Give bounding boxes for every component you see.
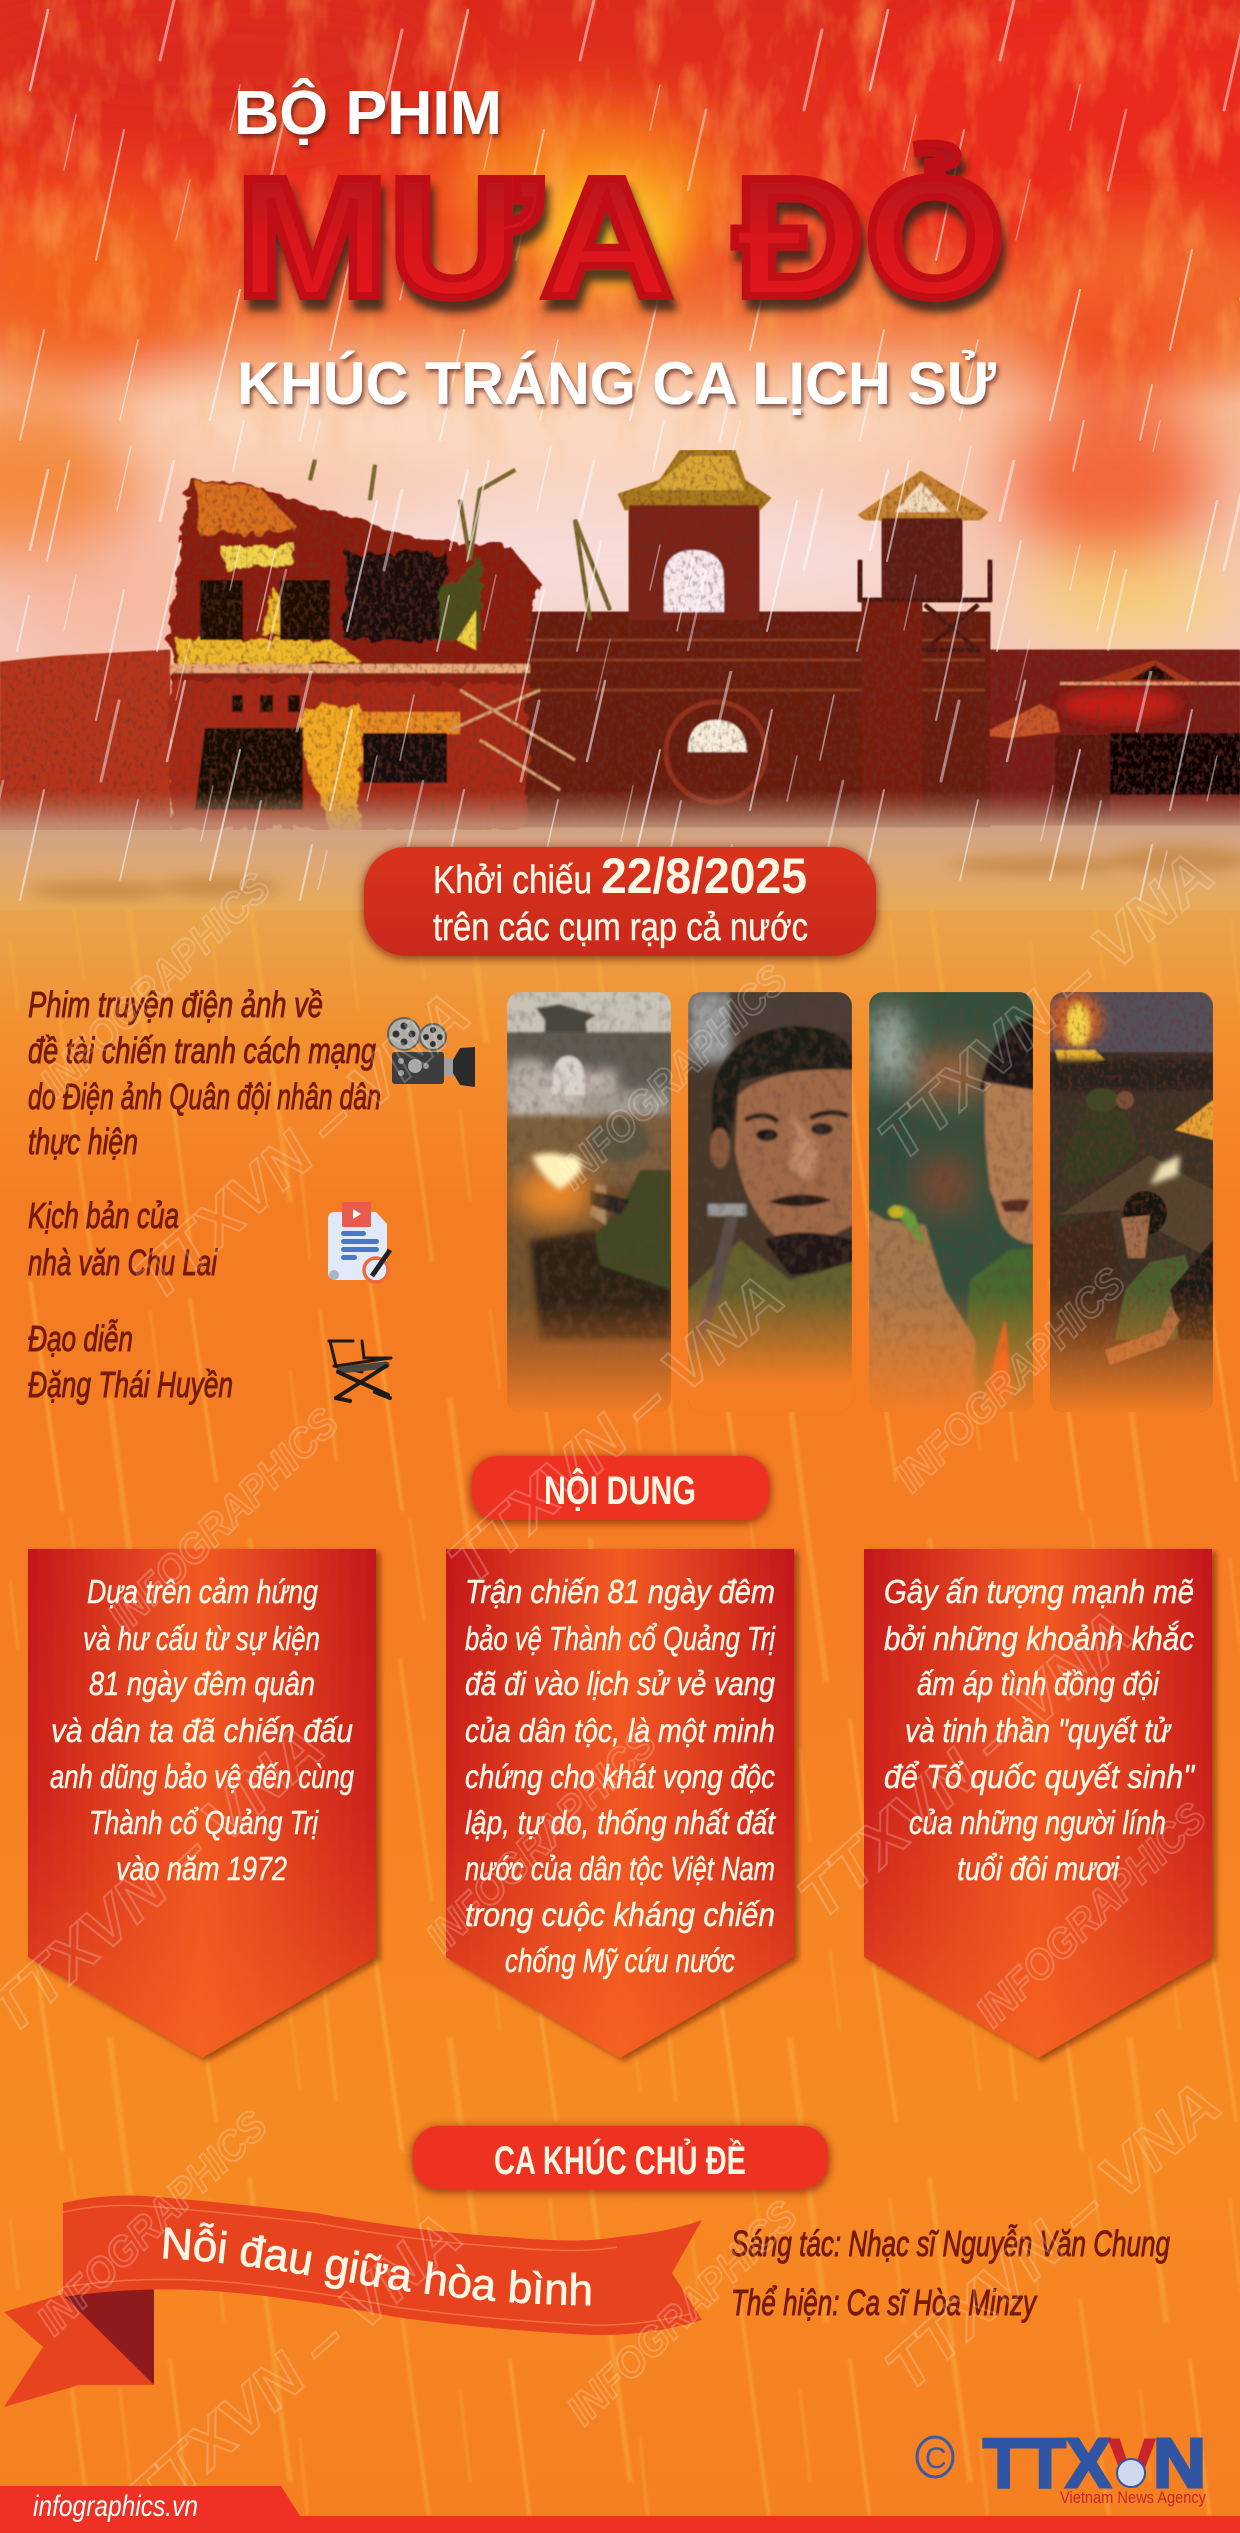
song credits — [731, 2223, 1170, 2323]
pennant 3: Gây ấn tượng mạnh mẽ — [884, 1573, 1194, 1610]
release date pill: Khởi chiếu — [433, 859, 592, 902]
hero: burning citadel illustration — [0, 450, 1240, 830]
watermarks: TTXVN – VNA — [435, 1262, 797, 1598]
release date pill: trên các cụm rạp cả nước — [433, 906, 808, 949]
film screenwriter text: nhà văn Chu Lai — [28, 1242, 218, 1283]
pennant 1: và hư cấu từ sự kiện — [83, 1620, 320, 1657]
copyright symbol: C — [925, 2442, 947, 2475]
pennant 3: bởi những khoảnh khắc — [884, 1620, 1194, 1657]
watchtower — [858, 471, 990, 822]
hero fade into orange — [0, 790, 1240, 910]
watermarks: INFOGRAPHICS — [967, 1793, 1215, 2036]
pennant 2: chứng cho khát vọng độc — [465, 1758, 775, 1795]
TTXVN logo: Vietnam News Agency — [1060, 2488, 1206, 2507]
section heading: CA KHÚC CHỦ ĐỀ: CA KHÚC CHỦ ĐỀ — [494, 2137, 746, 2183]
film director text: Đạo diễn — [28, 1318, 133, 1359]
hero: burning sky background — [0, 0, 1240, 880]
title: MƯA ĐỎ: ĐỎ — [734, 143, 1005, 333]
photo 4: soldiers in trenches — [1047, 992, 1213, 1415]
pennant 2: của dân tộc, là một minh — [465, 1712, 775, 1749]
right wall and roofs — [860, 650, 1240, 825]
film description text: do Điện ảnh Quân đội nhân dân — [28, 1076, 381, 1117]
watermarks: INFOGRAPHICS — [28, 2101, 276, 2344]
watermarks: INFOGRAPHICS — [886, 1258, 1134, 1501]
copyright symbol — [917, 2437, 953, 2477]
film description text: thực hiện — [28, 1121, 138, 1162]
watermarks: INFOGRAPHICS — [417, 1718, 665, 1961]
pennant 3: và tinh thần "quyết tử — [905, 1712, 1172, 1749]
roof debris sticks — [310, 460, 610, 620]
icon: director chair — [329, 1341, 391, 1401]
TTXVN logo — [983, 2424, 1206, 2507]
watermarks: TTXVN – VNA — [121, 979, 483, 1315]
orange page background with streaks — [0, 840, 1240, 2533]
photo 3: soldier with bird — [869, 992, 1033, 1415]
film screenwriter text: Kịch bản của — [28, 1195, 179, 1236]
pennant 3: ấm áp tình đồng đội — [917, 1665, 1160, 1702]
pennant 2: nước của dân tộc Việt Nam — [465, 1850, 775, 1887]
main wall with gate — [514, 612, 990, 827]
pennant 1: Dựa trên cảm hứng — [87, 1573, 319, 1610]
watermarks: INFOGRAPHICS — [99, 1398, 347, 1641]
footer band — [0, 2486, 1240, 2533]
pennant 2: bảo vệ Thành cổ Quảng Trị — [465, 1620, 776, 1657]
photo 1: battle at citadel — [507, 992, 671, 1415]
title: KHÚC TRÁNG CA LỊCH SỬ: KHÚC TRÁNG CA LỊCH SỬ — [237, 350, 996, 417]
film description text: Phim truyện điện ảnh về — [28, 984, 323, 1025]
icon: film camera — [388, 1018, 475, 1087]
icon: script document — [328, 1202, 390, 1282]
title: BỘ PHIM: BỘ PHIM — [234, 79, 502, 148]
title: MƯA ĐỎ — [236, 143, 1005, 333]
watermarks: INFOGRAPHICS — [558, 2191, 806, 2434]
pennant 2 — [446, 1549, 794, 2058]
footer band: infographics.vn — [33, 2490, 198, 2523]
release date pill: 22/8/2025 — [601, 848, 807, 904]
photo 2: soldier portrait — [688, 992, 852, 1422]
pennant 2: lập, tự do, thống nhất đất — [465, 1804, 777, 1841]
rain over hero — [0, 0, 1240, 920]
film description text — [28, 984, 381, 1162]
pennant 1: anh dũng bảo vệ đến cùng — [50, 1758, 355, 1795]
pennant 3: của những người lính — [909, 1804, 1166, 1841]
low left wall — [0, 650, 170, 830]
ribbon with song title — [4, 2196, 702, 2407]
pennant 2: trong cuộc kháng chiến — [465, 1896, 775, 1933]
ruined building — [170, 478, 575, 830]
section heading: NỘI DUNG — [472, 1456, 769, 1520]
pennant 2: đã đi vào lịch sử vẻ vang — [465, 1665, 776, 1702]
pennant 1: Thành cổ Quảng Trị — [89, 1804, 319, 1841]
film description text: đề tài chiến tranh cách mạng — [28, 1030, 376, 1071]
pennant 2: chống Mỹ cứu nước — [505, 1942, 735, 1979]
pennant 2: Trận chiến 81 ngày đêm — [465, 1573, 775, 1610]
central gate tower — [618, 450, 771, 620]
TTXVN logo: TTX — [983, 2424, 1111, 2502]
watermarks: TTXVN – VNA — [872, 2069, 1234, 2405]
film director text — [28, 1318, 233, 1405]
TTXVN logo: N — [1153, 2424, 1206, 2502]
watermarks: TTXVN – VNA — [113, 2200, 475, 2533]
release date pill — [364, 847, 876, 956]
pennant 1: vào năm 1972 — [116, 1850, 287, 1887]
pennant 3: để Tổ quốc quyết sinh" — [884, 1758, 1195, 1795]
pennant 1: 81 ngày đêm quân — [89, 1665, 315, 1702]
title: MƯA ĐỎ: MƯA — [236, 143, 673, 333]
watermarks: INFOGRAPHICS — [31, 863, 279, 1106]
watermarks: TTXVN – VNA — [865, 839, 1227, 1175]
brown ground blotches under hero — [30, 846, 1240, 900]
section heading: CA KHÚC CHỦ ĐỀ — [413, 2126, 828, 2189]
ribbon with song title: Nỗi đau giữa hòa bình — [163, 2222, 590, 2306]
watermarks: INFOGRAPHICS — [548, 955, 796, 1198]
pennant 3 — [864, 1549, 1212, 2058]
pennant 1: và dân ta đã chiến đấu — [51, 1712, 353, 1749]
watermarks — [0, 839, 1234, 2533]
song credits: Thể hiện: Ca sĩ Hòa Minzy — [731, 2282, 1037, 2323]
watermarks: TTXVN – VNA — [785, 1597, 1147, 1933]
film screenwriter text — [28, 1195, 218, 1283]
TTXVN logo: V — [1108, 2424, 1156, 2502]
section heading: NỘI DUNG: NỘI DUNG — [544, 1467, 696, 1513]
film director text: Đặng Thái Huyền — [28, 1364, 233, 1405]
pennant 3: tuổi đôi mươi — [957, 1850, 1120, 1887]
pennant 1 — [28, 1549, 376, 2058]
